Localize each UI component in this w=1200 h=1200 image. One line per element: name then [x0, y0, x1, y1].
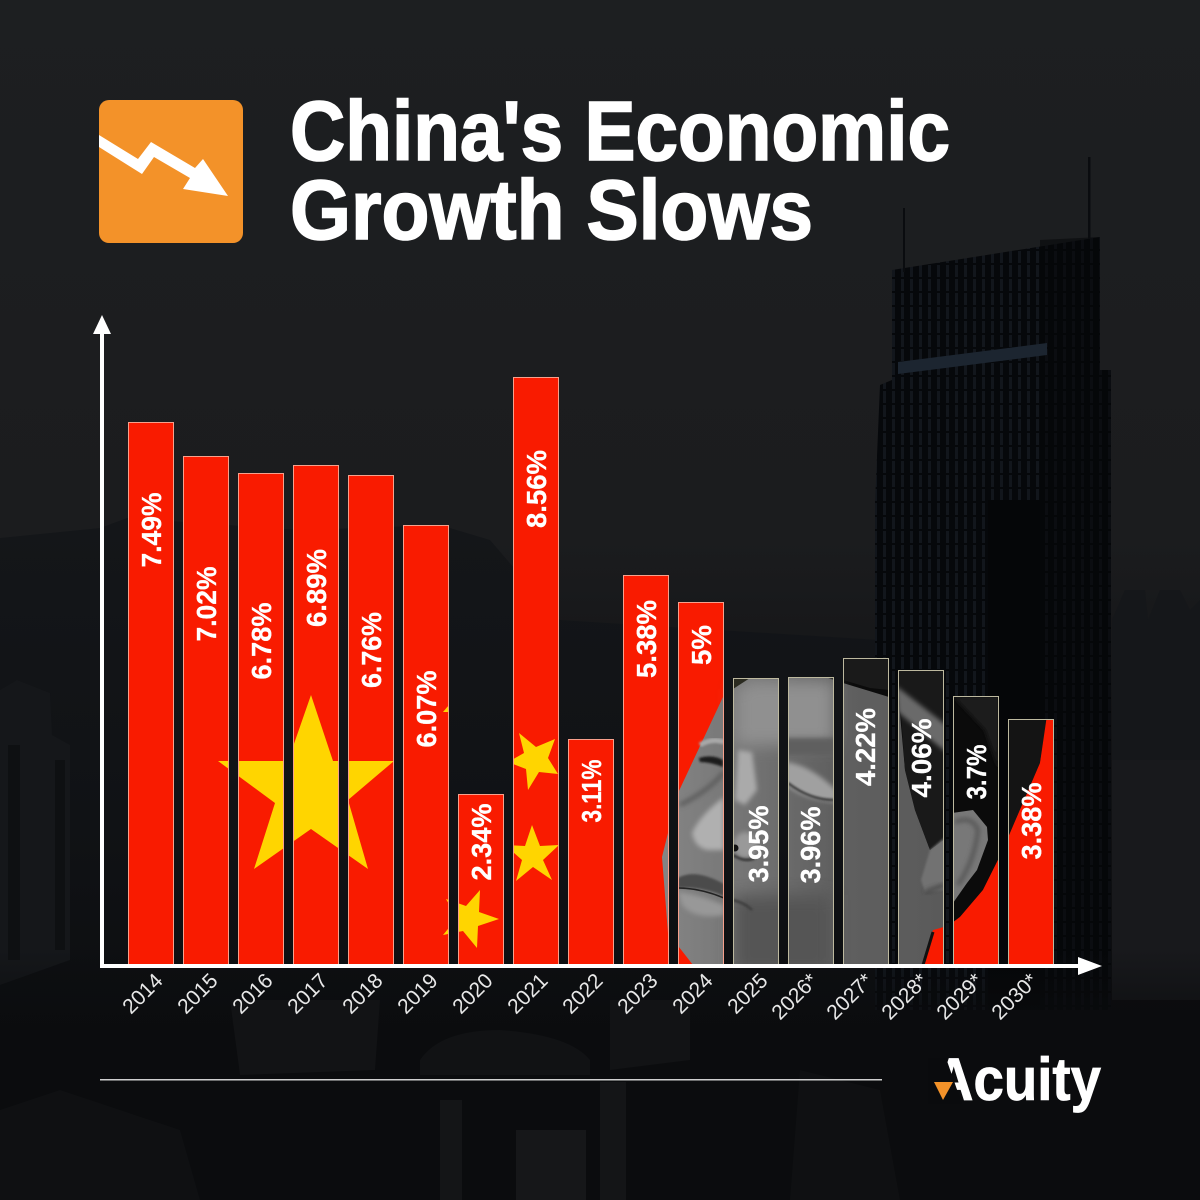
distant hills and skyline: [0, 518, 880, 1200]
year labels: 2017: [283, 969, 333, 1019]
year labels: 2020: [448, 969, 498, 1019]
bar value labels: 6.07%: [411, 670, 442, 748]
nose: [692, 797, 724, 850]
bar value labels: 3.7%: [961, 744, 992, 800]
bar value labels: 5%: [686, 625, 717, 665]
bars: flag and portrait fill clipped to bars: [120, 370, 1060, 975]
face: [662, 665, 944, 965]
title: China's Economic: [290, 84, 950, 178]
hair: [828, 678, 1044, 922]
bar value labels: 4.22%: [850, 708, 881, 786]
bar value labels: 6.89%: [301, 549, 332, 627]
bar value labels: 6.78%: [246, 602, 277, 680]
year labels: 2024: [668, 969, 718, 1019]
bar value labels: 7.02%: [191, 566, 222, 642]
eye 1: [699, 756, 723, 767]
lower city: [0, 950, 1200, 1050]
left tower: [0, 680, 70, 985]
hair strands on 2027 and 2028: [843, 658, 889, 690]
title: [290, 84, 950, 257]
bar value labels: 8.56%: [521, 450, 552, 528]
year labels: 2030*: [987, 969, 1043, 1024]
year labels: 2014: [118, 969, 168, 1019]
year labels: 2029*: [932, 969, 988, 1024]
mouth: [678, 874, 724, 896]
arrow: vertical axis: [93, 315, 111, 968]
ear: [952, 810, 988, 903]
bar value labels: 3.95%: [743, 805, 774, 882]
bar chart: [93, 315, 1102, 1024]
year labels: 2018: [338, 969, 388, 1019]
logo: Acuity: Acuity: [934, 1046, 1102, 1113]
bar value labels: 6.76%: [356, 612, 387, 688]
year labels: [118, 969, 1043, 1024]
bar value labels: 3.38%: [1016, 782, 1047, 860]
bar value labels: 7.49%: [136, 492, 167, 568]
red below hair and neck: [954, 720, 1047, 922]
year labels: 2016: [228, 969, 278, 1019]
eye 2: [785, 738, 837, 755]
title: Growth Slows: [290, 163, 813, 257]
right tower: [875, 237, 1111, 1010]
year labels: 2019: [393, 969, 443, 1019]
bar value labels: 3.11%: [576, 759, 607, 822]
year labels: 2015: [173, 969, 223, 1019]
year labels: 2028*: [877, 969, 933, 1024]
year labels: 2026*: [767, 969, 823, 1024]
year labels: 2023: [613, 969, 663, 1019]
year labels: 2025: [723, 969, 773, 1019]
bar value labels: 5.38%: [631, 600, 662, 678]
bar value labels: 3.96%: [795, 806, 826, 884]
bar outlines: [128, 378, 1054, 966]
bar value labels: [136, 450, 1047, 884]
bar value labels: 4.06%: [906, 718, 937, 798]
year labels: 2027*: [822, 969, 878, 1024]
icon: orange square with falling arrow: [99, 100, 243, 243]
bar value labels: 2.34%: [466, 803, 497, 880]
arrow: horizontal axis: [100, 957, 1102, 975]
year labels: 2021: [503, 969, 553, 1019]
year labels: 2022: [558, 969, 608, 1019]
